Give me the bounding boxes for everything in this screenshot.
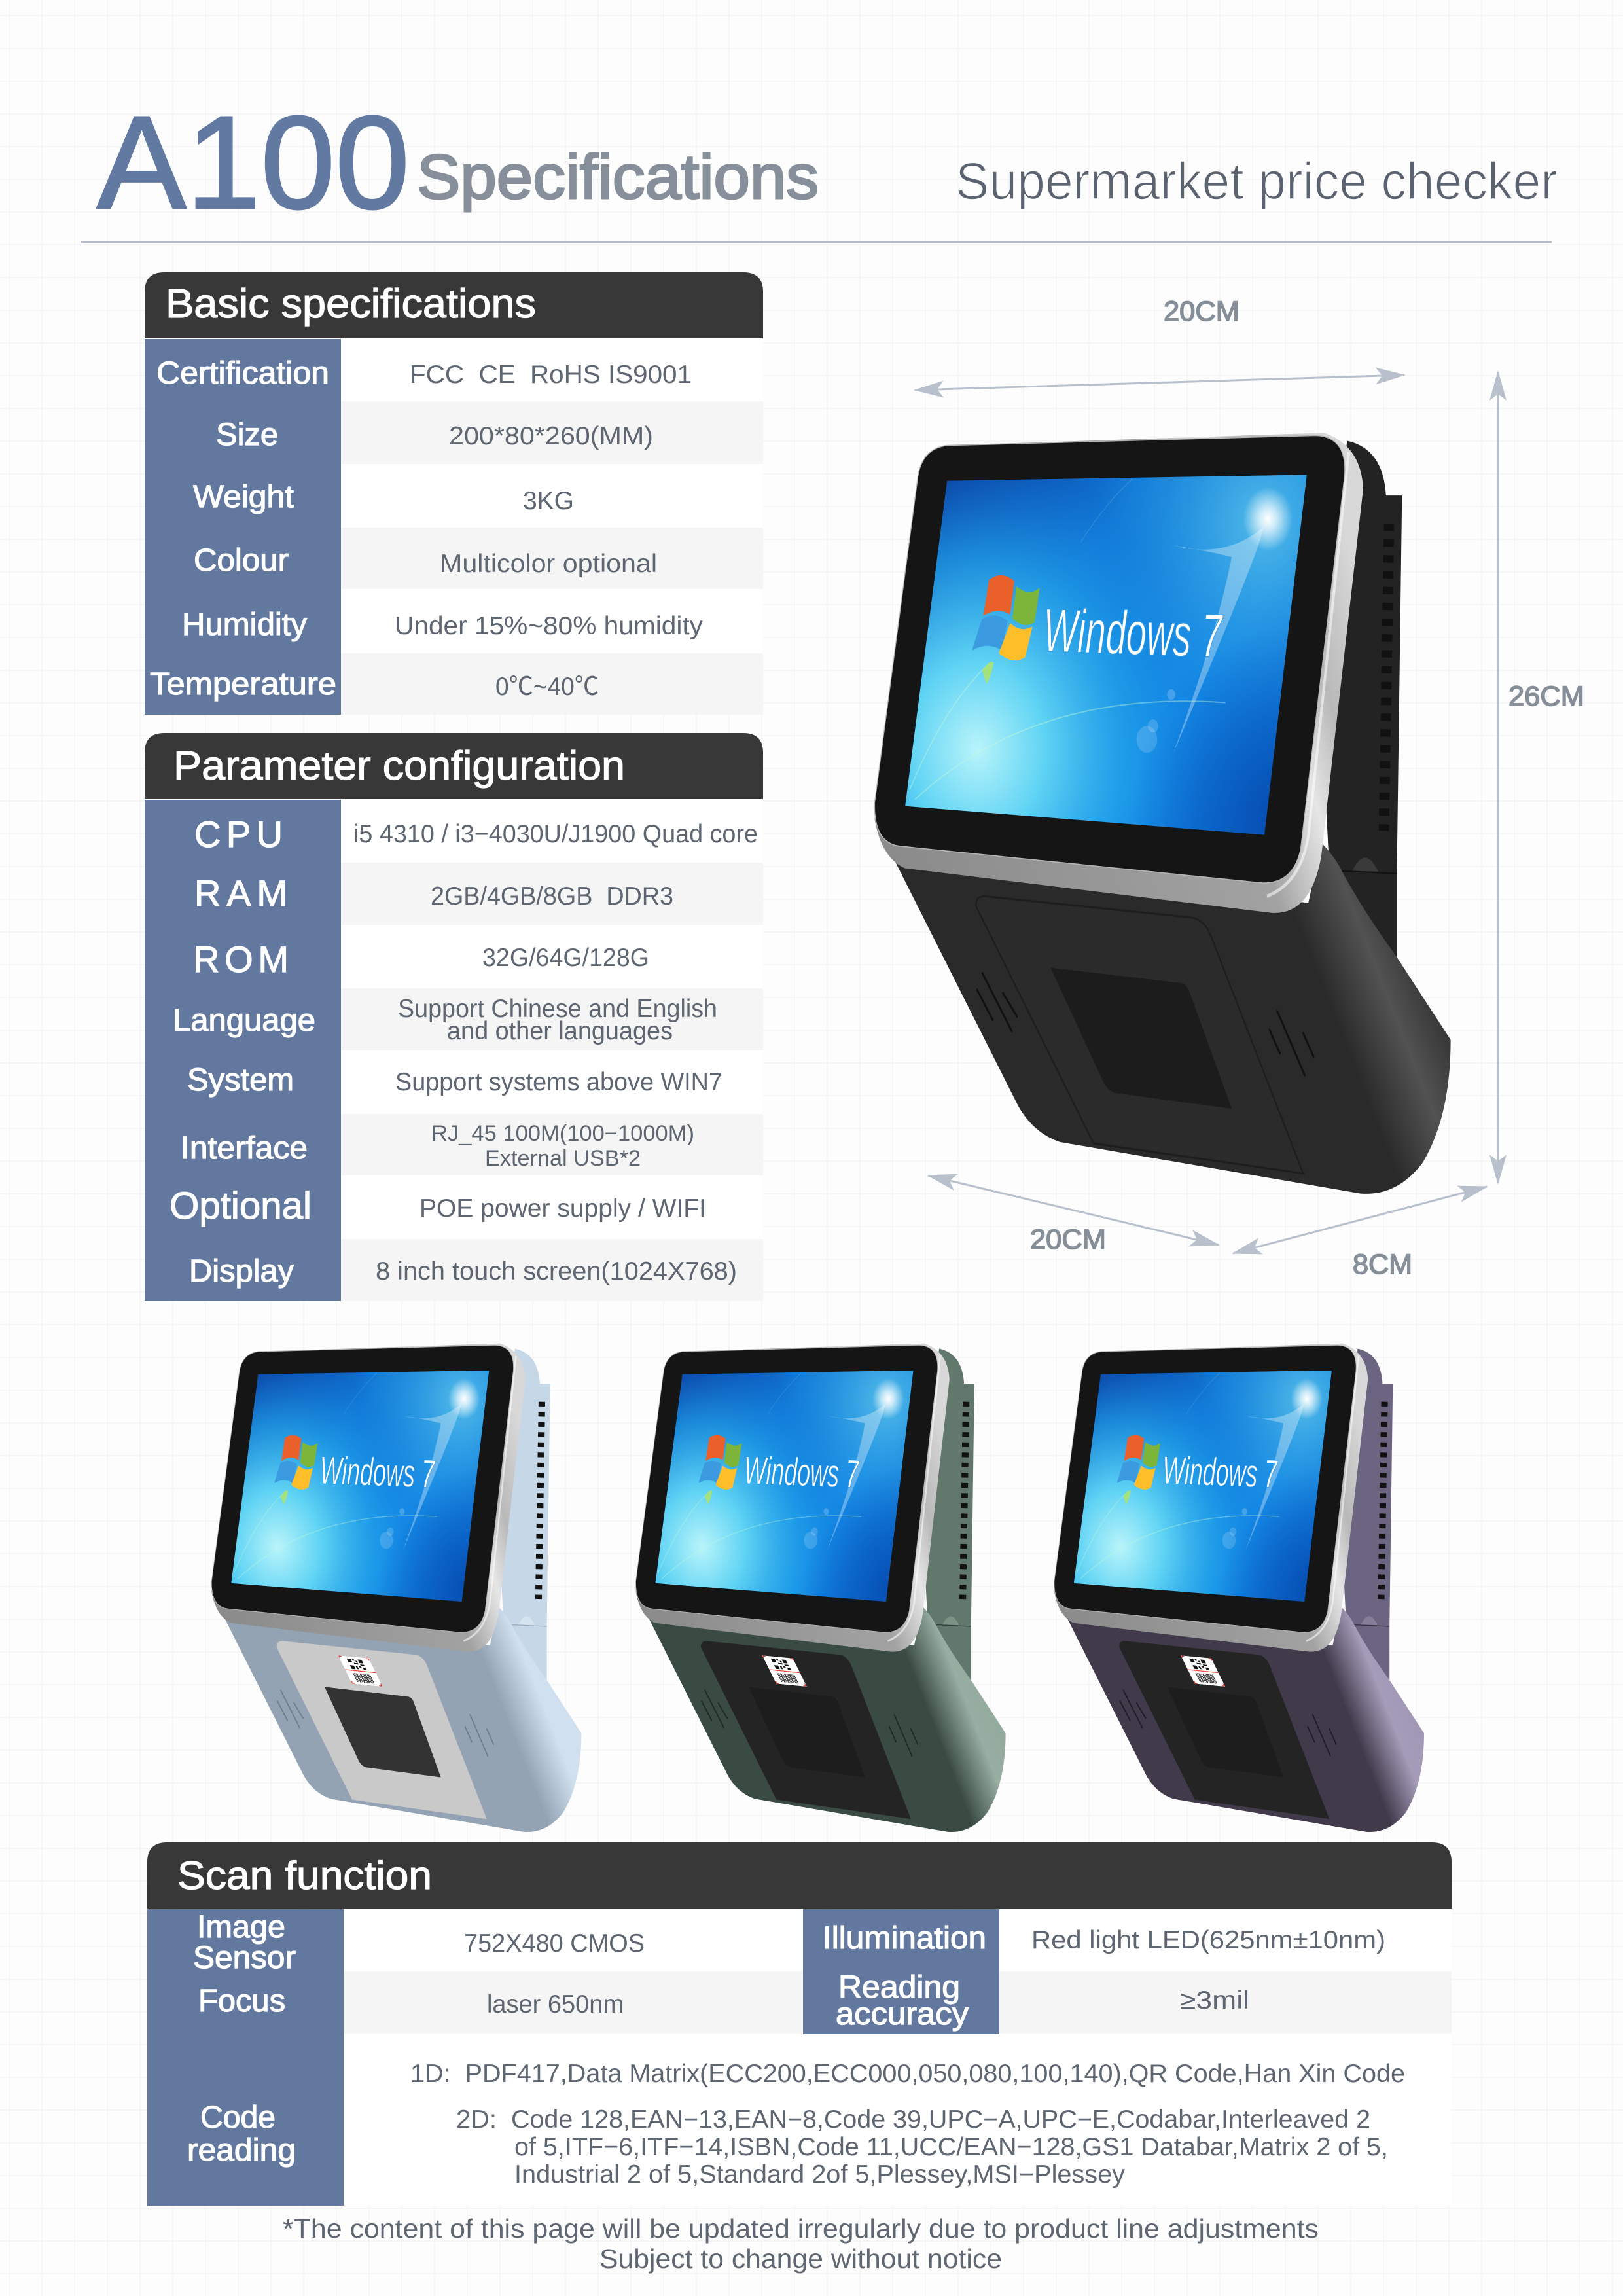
model name: A100 bbox=[97, 88, 410, 236]
title bbox=[97, 88, 1558, 236]
row: RAM bbox=[194, 872, 673, 914]
header bar bbox=[145, 272, 763, 338]
label: bottom width: 20CM bbox=[1030, 1224, 1106, 1255]
device: black price checker: Windows 7 bbox=[1043, 596, 1224, 670]
row: size bbox=[216, 418, 653, 452]
row: colour bbox=[194, 543, 657, 578]
label: image sensor: Image bbox=[197, 1910, 285, 1945]
panel: basic specifications: Basic specifications bbox=[166, 281, 536, 327]
row: size: Size bbox=[216, 418, 278, 452]
dimension arrows bbox=[915, 296, 1584, 1280]
device: green variant: Windows 7 bbox=[743, 1448, 860, 1496]
row: optional: Optional bbox=[169, 1185, 312, 1227]
specifications word: Specifications bbox=[417, 142, 819, 212]
arrow: bottom width bbox=[928, 1175, 1219, 1245]
label: illumination: Illumination bbox=[823, 1921, 986, 1956]
row: CPU: CPU bbox=[194, 814, 283, 855]
arrow: depth bbox=[1233, 1187, 1487, 1253]
arrow: top width bbox=[915, 375, 1404, 390]
row: certification bbox=[156, 356, 692, 391]
row: language: and other languages bbox=[447, 1017, 673, 1045]
value: focus: laser 650nm bbox=[487, 1990, 624, 2018]
row: certification: Certification bbox=[156, 356, 329, 391]
device: purple variant: Windows 7 bbox=[1162, 1448, 1278, 1496]
label: code reading: reading bbox=[187, 2133, 296, 2168]
label: top width: 20CM bbox=[1164, 296, 1240, 327]
value: illumination: Red light LED(625nm±10nm) bbox=[1031, 1926, 1385, 1954]
row: colour: Multicolor optional bbox=[440, 550, 657, 578]
row: RAM: 2GB/4GB/8GB DDR3 bbox=[431, 882, 673, 910]
2D codes: 2D: bbox=[456, 2106, 497, 2134]
2D codes: of 5,ITF−6,ITF−14,ISBN,Code 11,UCC/EAN−128,GS1 Databar,Matrix 2 of 5, bbox=[514, 2133, 1388, 2161]
row: weight bbox=[193, 480, 574, 515]
value: sensor: 752X480 CMOS bbox=[464, 1929, 645, 1958]
subtitle: Supermarket price checker bbox=[955, 152, 1558, 210]
row: ROM: ROM bbox=[193, 939, 289, 980]
device: green variant bbox=[636, 1344, 1006, 1832]
row: ROM: 32G/64G/128G bbox=[482, 944, 649, 972]
value: reading accuracy: ≥3mil bbox=[1180, 1986, 1249, 2015]
2D codes: Code 128,EAN−13,EAN−8,Code 39,UPC−A,UPC−E,Codabar,Interleaved 2 bbox=[511, 2106, 1370, 2134]
row: weight: Weight bbox=[193, 480, 294, 514]
row: system: System bbox=[187, 1063, 294, 1098]
arrow: height bbox=[1497, 372, 1499, 1183]
row: humidity: Under 15%~80% humidity bbox=[395, 612, 704, 640]
QR code sticker bbox=[338, 1655, 383, 1687]
panel: scan function bbox=[147, 1842, 1452, 2206]
2D codes bbox=[456, 2106, 1388, 2189]
row: CPU: i5 4310 / i3−4030U/J1900 Quad core bbox=[353, 820, 758, 848]
label: image sensor: Sensor bbox=[193, 1941, 296, 1975]
panel: basic specifications bbox=[145, 272, 763, 715]
row: certification: FCC CE RoHS IS9001 bbox=[410, 361, 692, 389]
panel: scan function: Scan function bbox=[177, 1854, 432, 1897]
row: CPU bbox=[194, 814, 758, 855]
row: optional bbox=[169, 1185, 706, 1227]
label: reading accuracy: Reading bbox=[838, 1970, 960, 2005]
2D codes: Industrial 2 of 5,Standard 2of 5,Plessey,MSI−Plessey bbox=[514, 2161, 1126, 2189]
label: focus: Focus bbox=[198, 1984, 285, 2018]
label: height: 26CM bbox=[1508, 681, 1584, 712]
row: display bbox=[189, 1254, 737, 1289]
row: language: Support Chinese and English bbox=[398, 995, 717, 1023]
row: ROM bbox=[193, 939, 649, 980]
row: RAM: RAM bbox=[194, 872, 287, 914]
row: system: Support systems above WIN7 bbox=[395, 1068, 722, 1096]
row: system bbox=[187, 1063, 722, 1098]
row: display: Display bbox=[189, 1254, 294, 1289]
row: interface: Interface bbox=[181, 1131, 308, 1166]
footer note: Subject to change without notice bbox=[599, 2244, 1002, 2274]
row: interface bbox=[181, 1121, 694, 1171]
row: humidity: Humidity bbox=[182, 607, 307, 642]
panel: parameter configuration bbox=[145, 733, 763, 1301]
label: image sensor bbox=[193, 1910, 296, 1975]
device: light blue variant bbox=[211, 1344, 581, 1832]
footer note: *The content of this page will be updated irregularly due to product line adjustments bbox=[283, 2214, 1319, 2244]
row: interface: RJ_45 100M(100−1000M) bbox=[431, 1121, 694, 1146]
label: code reading bbox=[187, 2100, 296, 2168]
row: display: 8 inch touch screen(1024X768) bbox=[376, 1257, 737, 1285]
header bar bbox=[147, 1842, 1452, 1909]
QR code sticker bbox=[762, 1655, 807, 1687]
row: optional: POE power supply / WIFI bbox=[419, 1194, 706, 1223]
header bar bbox=[145, 733, 763, 799]
row: temperature: Temperature bbox=[150, 667, 336, 702]
label: reading accuracy: accuracy bbox=[836, 1997, 969, 2032]
1D codes: 1D: PDF417,Data Matrix(ECC200,ECC000,050,080,100,140),QR Code,Han Xin Code bbox=[410, 2060, 1405, 2088]
footer note bbox=[283, 2214, 1319, 2274]
label: reading accuracy bbox=[836, 1970, 969, 2032]
QR code sticker bbox=[1181, 1655, 1225, 1687]
label: code reading: Code bbox=[200, 2100, 276, 2135]
row: colour: Colour bbox=[194, 543, 289, 578]
row: language bbox=[173, 995, 717, 1045]
panel: parameter configuration: Parameter configuration bbox=[173, 744, 625, 789]
row: temperature: 0℃~40℃ bbox=[495, 673, 599, 701]
row: language: Language bbox=[173, 1003, 315, 1038]
label: depth: 8CM bbox=[1353, 1249, 1412, 1280]
row: interface: External USB*2 bbox=[485, 1146, 641, 1171]
device: light blue variant: Windows 7 bbox=[319, 1448, 436, 1496]
device: black price checker bbox=[874, 433, 1451, 1194]
row: temperature bbox=[150, 667, 599, 702]
row: size: 200*80*260(MM) bbox=[449, 422, 653, 450]
row: humidity bbox=[182, 607, 704, 642]
device: purple variant bbox=[1054, 1344, 1424, 1832]
row: weight: 3KG bbox=[523, 487, 574, 515]
